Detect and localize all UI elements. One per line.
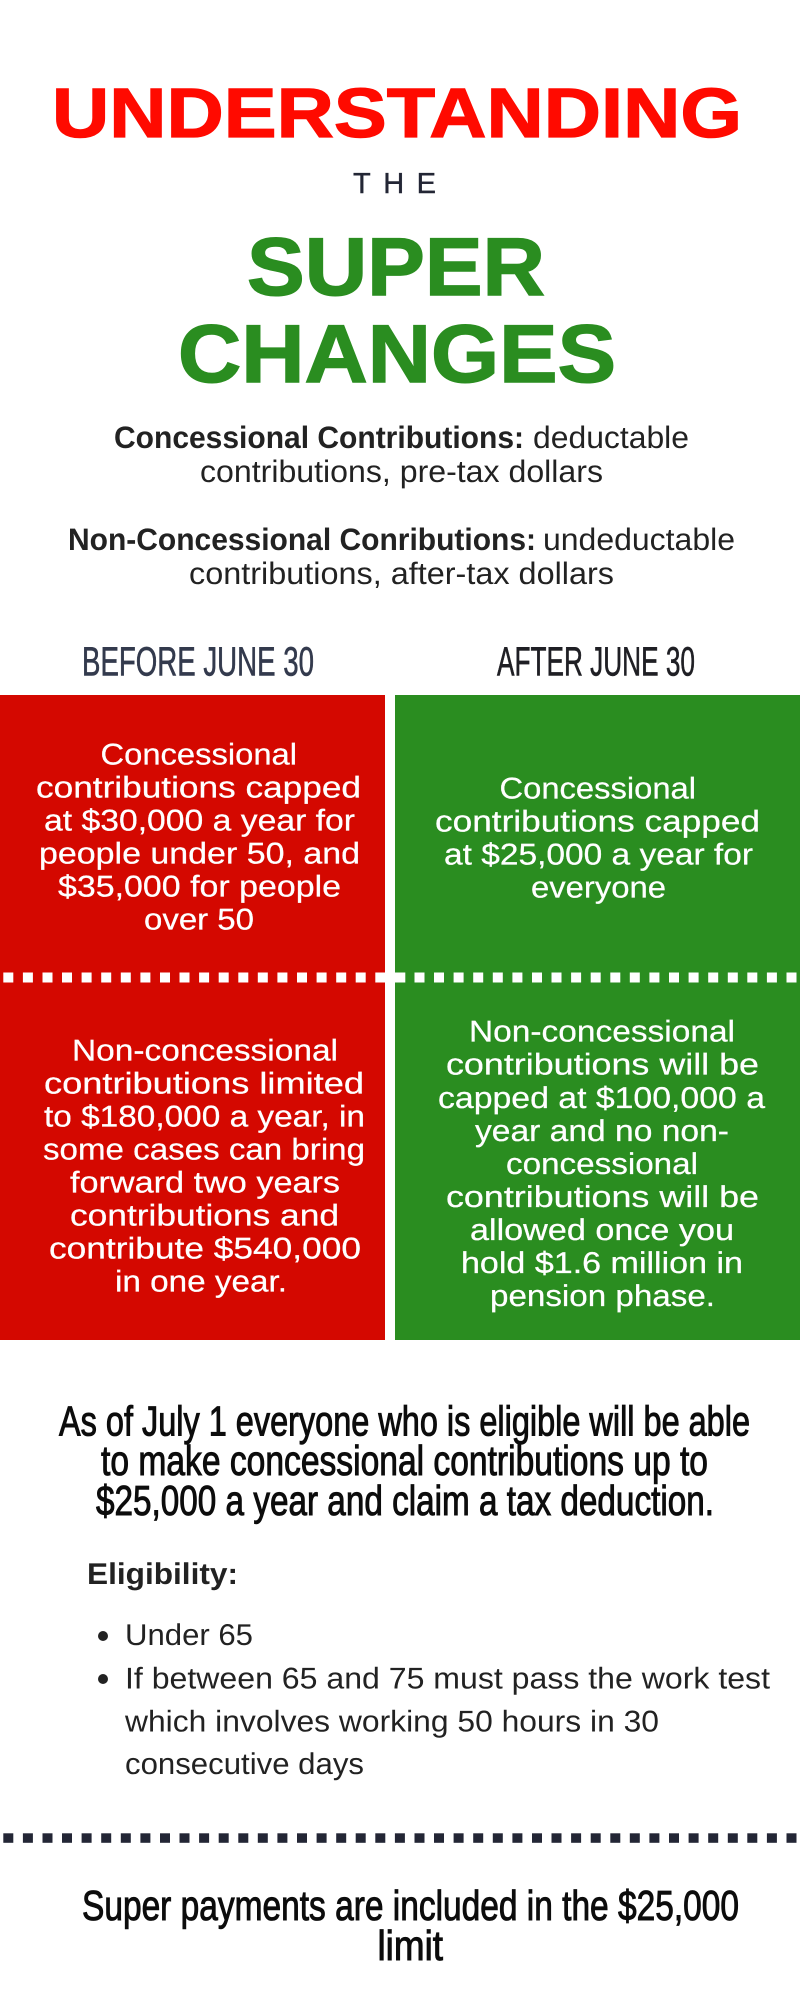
text: after non-concessional: year and no non- xyxy=(475,1115,729,1148)
text: before concessional: $35,000 for people xyxy=(58,871,341,904)
text: july 1 statement xyxy=(59,1398,750,1524)
eligibility heading: Eligibility: xyxy=(87,1558,238,1591)
eligibility xyxy=(87,1558,771,1781)
eligibility item: work test: consecutive days xyxy=(125,1748,364,1781)
title: super changes: SUPER xyxy=(247,222,545,313)
text: after non-concessional: allowed once you xyxy=(470,1214,734,1247)
text: after non-concessional: capped at $100,000 a xyxy=(438,1082,765,1115)
panel: after june 30 xyxy=(395,695,800,1340)
text: super payments note: limit xyxy=(378,1922,443,1969)
eligibility item: work test: which involves working 50 hours in 30 xyxy=(124,1705,659,1738)
text: before concessional: at $30,000 a year for xyxy=(44,804,355,838)
text: before non-concessional: contribute $540,000 xyxy=(49,1233,361,1266)
text: before non-concessional: forward two years xyxy=(70,1167,340,1200)
text: before concessional xyxy=(36,738,361,937)
definition: non-concessional contributions xyxy=(68,522,735,591)
text: after non-concessional xyxy=(438,1016,765,1313)
text: before non-concessional: contributions and xyxy=(70,1200,339,1233)
definition: concessional contributions: contributions, pre-tax dollars xyxy=(200,454,603,489)
text: before non-concessional: some cases can bring xyxy=(43,1134,365,1167)
text: before concessional: people under 50, and xyxy=(39,838,360,871)
text: after concessional: everyone xyxy=(531,872,666,904)
title: the: THE xyxy=(353,168,436,200)
text: before concessional: contributions capped xyxy=(36,772,361,804)
title: super changes xyxy=(178,222,616,400)
eligibility item: work test xyxy=(98,1663,771,1781)
definition: non-concessional contributions: contributions, after-tax dollars xyxy=(189,556,614,591)
text: after concessional: contributions capped xyxy=(435,805,760,838)
definition: concessional contributions: deductable xyxy=(533,420,689,455)
text: after non-concessional: contributions will be xyxy=(446,1181,759,1214)
definition: non-concessional contributions: Non-Concessional Conributions: xyxy=(68,522,536,557)
definition: concessional contributions xyxy=(114,420,689,489)
column heading: before: BEFORE JUNE 30 xyxy=(82,638,314,684)
text: after concessional: Concessional xyxy=(500,772,696,805)
eligibility item: under 65: Under 65 xyxy=(125,1619,253,1652)
text: before non-concessional xyxy=(43,1034,365,1299)
title xyxy=(52,74,742,400)
title: understanding: UNDERSTANDING xyxy=(52,74,742,152)
definition: non-concessional contributions: undeductable xyxy=(543,522,735,557)
text: after non-concessional: pension phase. xyxy=(490,1280,715,1313)
text: after non-concessional: concessional xyxy=(506,1148,698,1181)
text: before concessional: over 50 xyxy=(144,904,254,937)
text: before concessional: Concessional xyxy=(100,738,297,772)
text: after concessional xyxy=(435,772,760,904)
text: after non-concessional: contributions will be xyxy=(446,1049,759,1082)
text: after concessional: at $25,000 a year for xyxy=(444,838,753,872)
panel: before june 30 xyxy=(0,695,385,1340)
text: before non-concessional: Non-concessional xyxy=(72,1034,338,1067)
text: super payments note xyxy=(82,1882,739,1969)
definitions xyxy=(68,420,735,591)
definition: concessional contributions: Concessional Contributions: xyxy=(114,420,524,455)
title: super changes: CHANGES xyxy=(178,309,616,400)
text: before non-concessional: to $180,000 a year, in xyxy=(44,1100,365,1134)
text: before non-concessional: in one year. xyxy=(115,1266,287,1299)
column heading: after: AFTER JUNE 30 xyxy=(497,638,695,684)
text: before non-concessional: contributions limited xyxy=(44,1068,364,1100)
eligibility item: work test: If between 65 and 75 must pass the work test xyxy=(125,1663,771,1696)
text: after non-concessional: hold $1.6 million in xyxy=(461,1247,743,1280)
text: after non-concessional: Non-concessional xyxy=(469,1016,735,1049)
